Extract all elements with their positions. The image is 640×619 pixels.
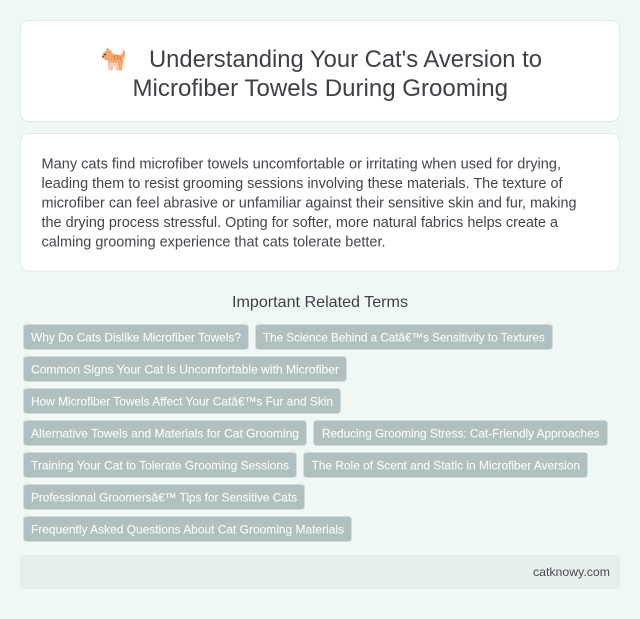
summary paragraph: the drying process stressful. Opting for softer, more natural fabrics helps create a [42, 214, 559, 231]
summary paragraph: calming grooming experience that cats tolerate better. [42, 234, 386, 250]
tag: Common Signs Your Cat Is Uncomfortable with Microfiber [31, 362, 339, 376]
tag list [24, 324, 608, 542]
tag: Training Your Cat to Tolerate Grooming Sessions [31, 458, 289, 472]
tag: The Role of Scent and Static in Microfiber Aversion [312, 458, 580, 472]
summary paragraph: leading them to resist grooming sessions involving these materials. The texture of [42, 175, 563, 192]
tag [24, 516, 352, 542]
tag [24, 324, 248, 350]
tag [24, 452, 296, 478]
tag [24, 388, 340, 414]
tag [314, 420, 608, 446]
tag [304, 452, 588, 478]
heading: related terms: Important Related Terms [232, 294, 408, 311]
tag: Alternative Towels and Materials for Cat Grooming [31, 426, 299, 440]
summary paragraph: microfiber can feel abrasive or unfamiliar against their sensitive skin and fur, making [42, 194, 576, 212]
tag [24, 484, 304, 510]
tag [24, 356, 346, 382]
footer [20, 555, 620, 589]
title text: Understanding Your Cat's Aversion to [149, 46, 542, 73]
tag [256, 324, 552, 350]
tag: The Science Behind a Catâ€™s Sensitivity to Textures [263, 330, 545, 344]
panel: summary [20, 134, 620, 271]
tag [24, 420, 306, 446]
summary paragraph [42, 156, 576, 250]
tag: Why Do Cats Dislike Microfiber Towels? [31, 330, 241, 344]
tag: How Microfiber Towels Affect Your Catâ€™s Fur and Skin [31, 394, 333, 408]
summary paragraph: Many cats find microfiber towels uncomfortable or irritating when used for drying, [42, 156, 561, 172]
panel: title [20, 20, 620, 122]
footer source: catknowy.com [533, 565, 610, 579]
tag: Professional Groomersâ€™ Tips for Sensitive Cats [31, 490, 297, 504]
tag: Reducing Grooming Stress: Cat-Friendly Approaches [322, 426, 600, 440]
icon: cat [102, 48, 125, 70]
tag: Frequently Asked Questions About Cat Grooming Materials [31, 522, 344, 536]
title text [132, 46, 542, 102]
title text: Microfiber Towels During Grooming [132, 75, 508, 102]
